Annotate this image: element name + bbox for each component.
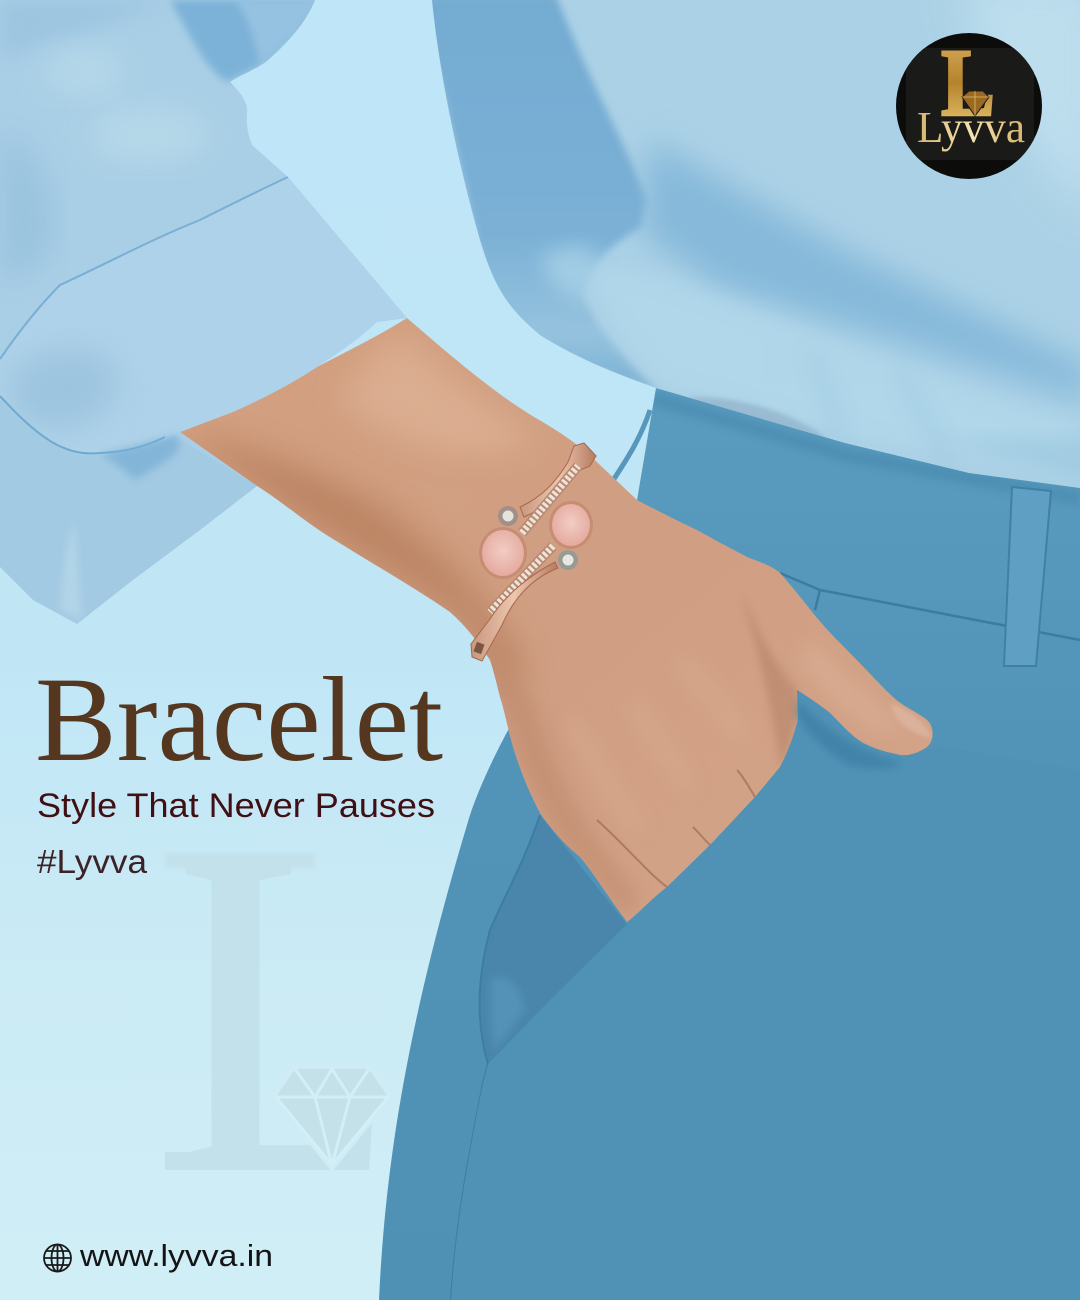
upper crystal — [498, 506, 518, 526]
pocket front panel — [451, 690, 1080, 1300]
icon: globe — [44, 1244, 71, 1272]
shirt vertical wrinkles — [810, 350, 950, 465]
shadow under shirt hem — [650, 392, 1080, 505]
trousers — [379, 388, 1080, 1300]
watermark logo — [165, 745, 394, 1274]
shirt tuck shadow — [691, 396, 824, 436]
shirt lower wedge highlight — [590, 268, 1080, 480]
cuff — [191, 368, 314, 428]
right stone — [549, 501, 593, 549]
thumbnail — [891, 704, 930, 738]
trouser pocket inner light fold — [492, 980, 522, 1040]
arm lower shading — [180, 432, 525, 697]
hashtag: #Lyvva — [37, 843, 148, 880]
shirt diagonal shadow band — [640, 140, 1080, 402]
website address: www.lyvva.in — [79, 1238, 273, 1273]
sleeve upper highlights — [62, 58, 108, 86]
bracelet — [471, 443, 596, 661]
sleeve upper shadows — [4, 4, 118, 48]
waistband seam — [780, 573, 1080, 640]
website link — [44, 1238, 273, 1273]
lower sleeve shadow — [100, 436, 179, 480]
arm and hand — [180, 318, 933, 922]
shirt right hem shadow — [992, 440, 1080, 474]
watermark diamond — [270, 1065, 394, 1172]
shirt left dark panel — [420, 0, 660, 392]
bracelet crystal band lower — [490, 546, 553, 612]
hand left shading — [496, 684, 635, 910]
lower crystal — [558, 550, 578, 570]
bracelet lower gold band and clasp — [471, 562, 558, 661]
trouser pocket inner panel — [480, 815, 628, 1064]
watermark foot — [165, 1152, 195, 1170]
belt loop — [1004, 487, 1051, 666]
lower sleeve highlight — [61, 536, 80, 616]
shirt left panel light spot — [540, 247, 600, 305]
bracelet upper gold band — [520, 443, 596, 517]
sleeve outer lighter fold — [238, 2, 313, 61]
shirt — [420, 0, 1080, 488]
shirt top right highlight — [967, 0, 1080, 193]
clasp slot — [474, 642, 484, 654]
thumb highlight — [816, 661, 850, 696]
cuff top seam — [0, 177, 288, 359]
arm highlight — [353, 346, 514, 452]
cuff bottom seam — [0, 396, 165, 453]
sleeve top dark fold — [170, 0, 320, 82]
thumb web shadow — [750, 620, 797, 760]
lower right trouser fold — [880, 1110, 1050, 1300]
lower sleeve — [0, 398, 257, 624]
watermark top serif — [165, 853, 315, 868]
cuff shadow — [12, 350, 115, 428]
trouser side seam — [451, 815, 540, 1300]
logo wordmark: Lyvva — [917, 103, 1025, 152]
drawstring — [612, 410, 650, 482]
logo inner panel — [906, 48, 1034, 160]
left stone — [479, 527, 527, 579]
finger creases — [597, 770, 755, 887]
subheading: Style That Never Pauses — [37, 787, 435, 825]
logo diamond — [962, 91, 989, 116]
heading: Bracelet — [35, 653, 443, 787]
watermark letter L: L — [180, 745, 388, 1274]
logo badge — [896, 29, 1042, 179]
tendon highlights — [570, 660, 745, 830]
left sleeve — [0, 0, 407, 624]
thumb cast shadow — [797, 700, 901, 768]
bracelet crystal band upper — [522, 466, 578, 533]
logo letter L: L — [941, 29, 995, 136]
